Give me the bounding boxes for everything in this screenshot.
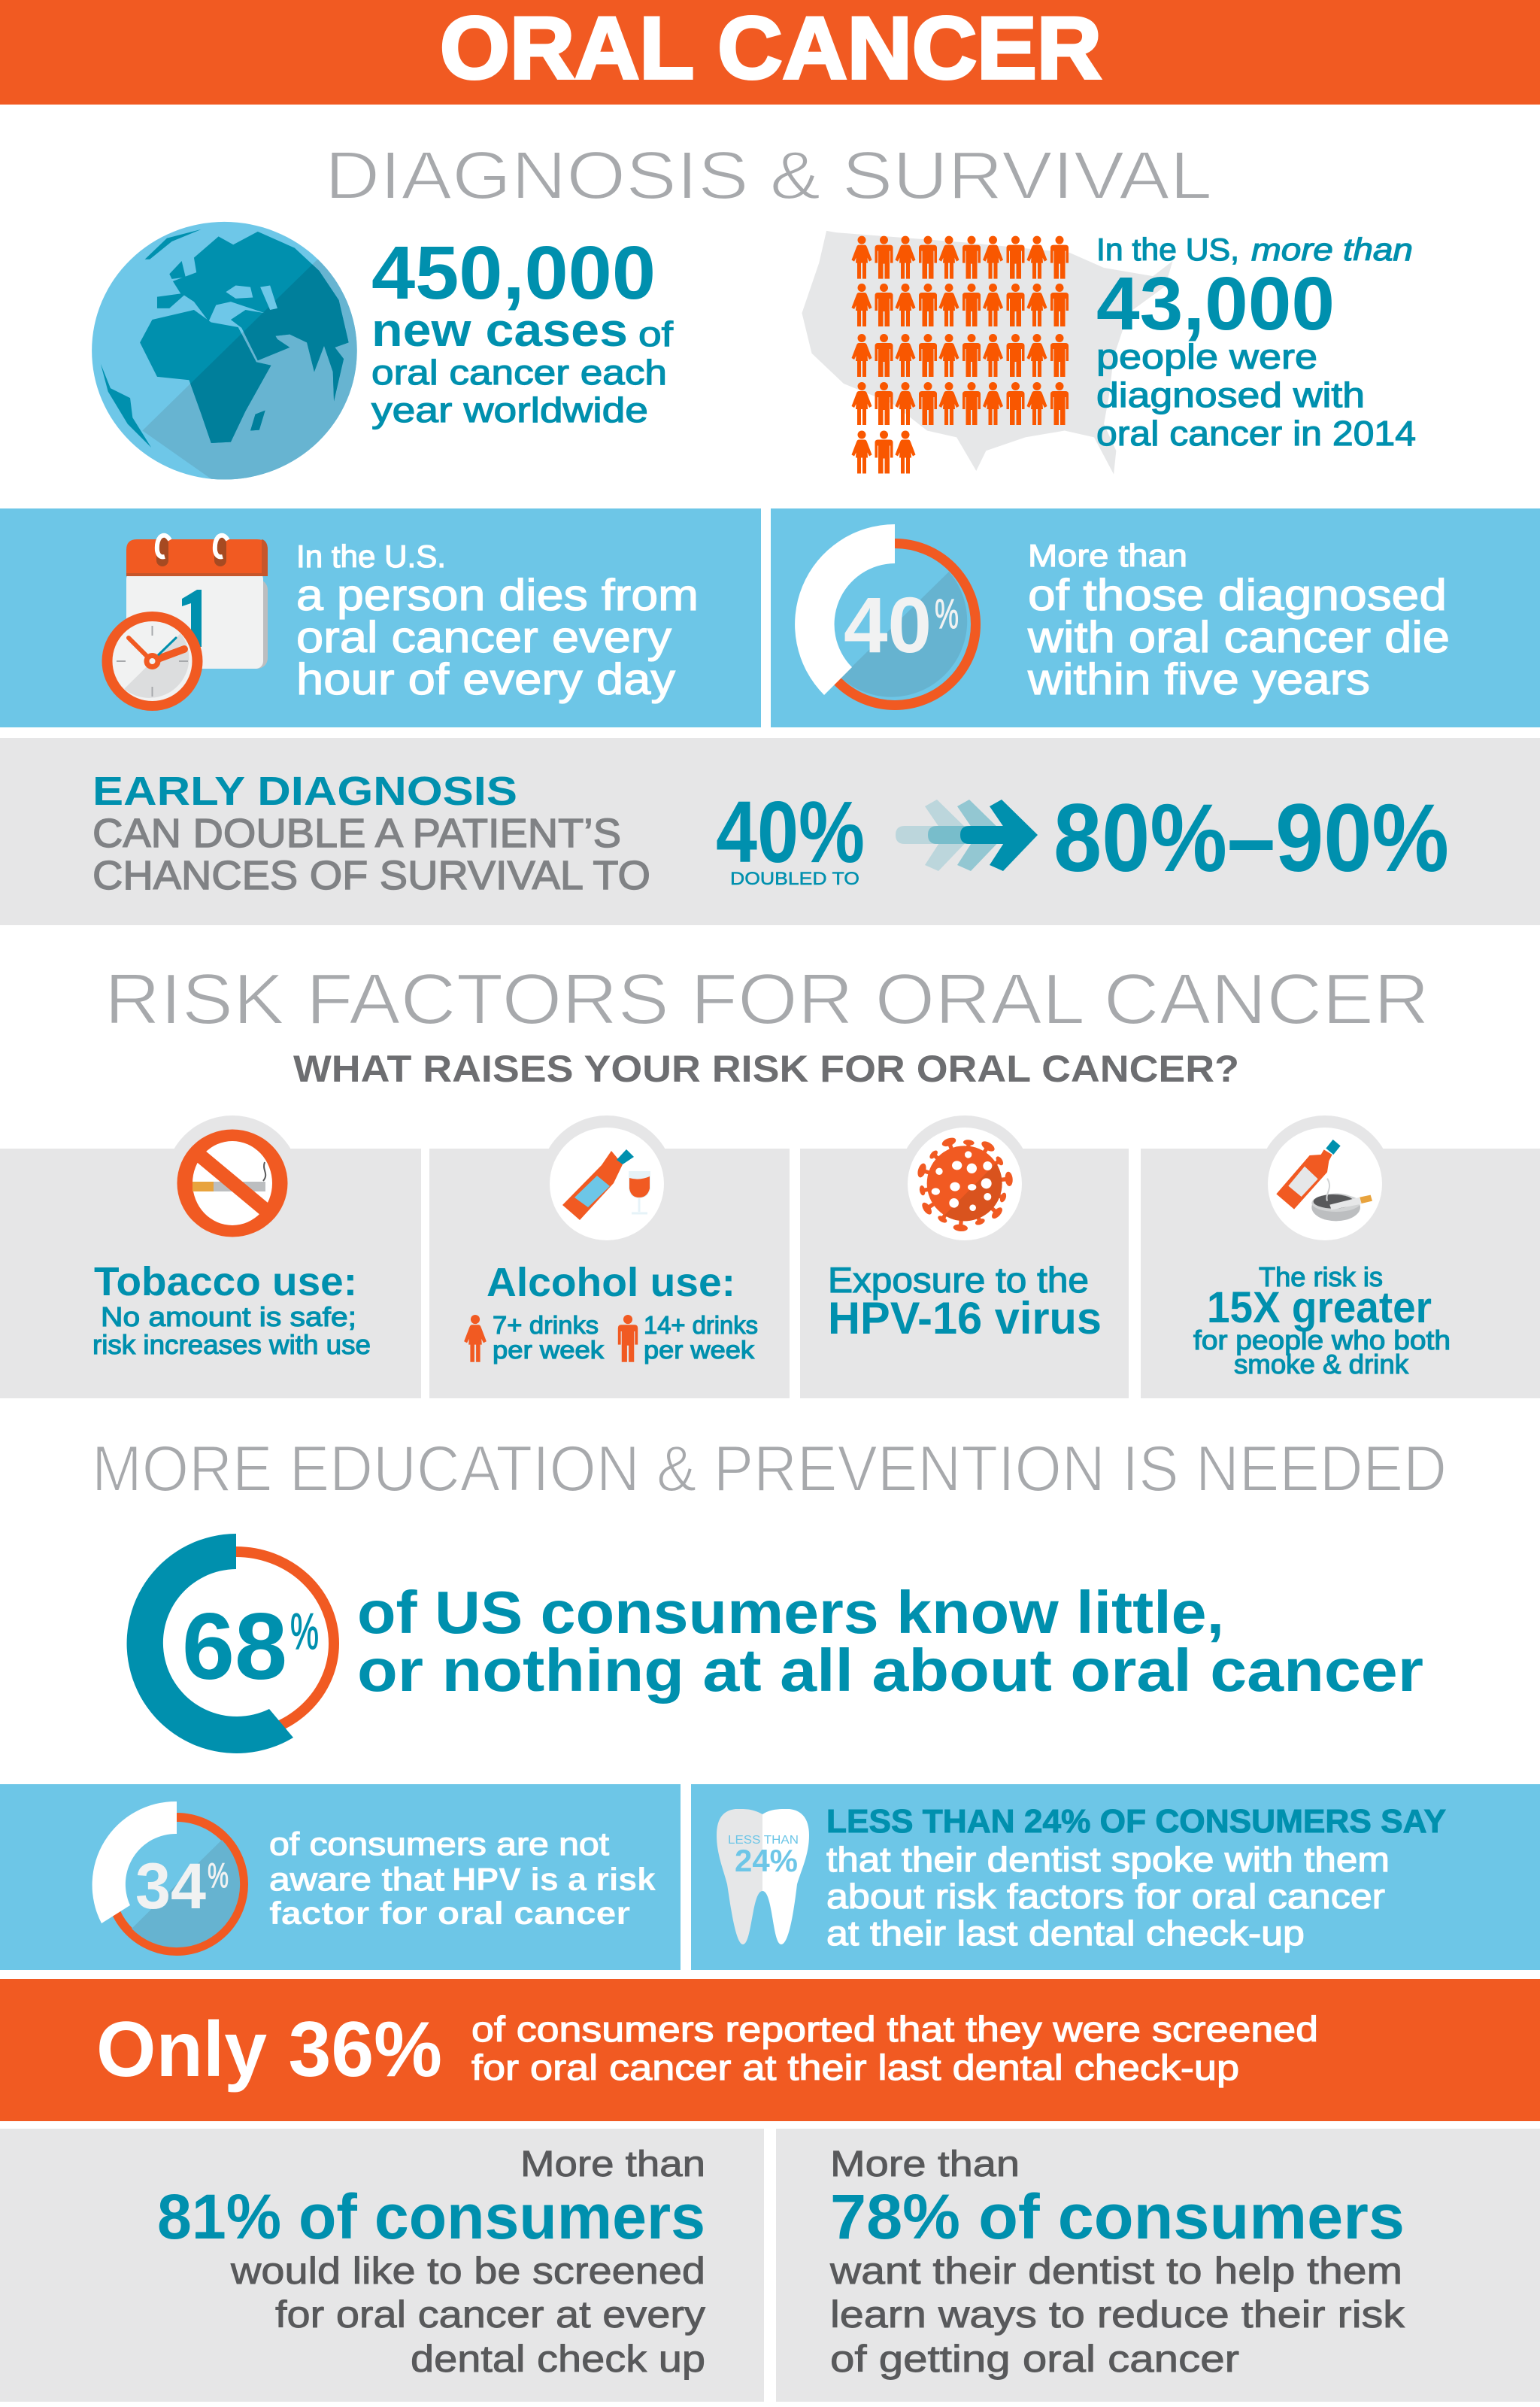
stat: 43,000 diagnosed in US: oral cancer in 2014 — [1096, 414, 1416, 453]
heading: diagnosis and survival: DIAGNOSIS & SURVIVAL — [325, 138, 1212, 214]
icon: US map — [802, 231, 1172, 475]
donut chart: 40% — [795, 524, 976, 706]
panel: 81 percent would like screening — [0, 2129, 764, 2402]
icon: male figure — [618, 1315, 638, 1362]
title banner: ORAL CANCER — [440, 0, 1102, 97]
text: early diagnosis can double — [92, 769, 650, 898]
text: exposure to HPV-16: HPV-16 virus — [828, 1293, 1102, 1343]
text: dentist spoke: that their dentist spoke with them — [826, 1840, 1390, 1879]
text: screened every check up: dental check up — [411, 2338, 705, 2380]
stat: 450,000 new cases worldwide: new cases — [371, 305, 628, 357]
icon: globe — [92, 222, 373, 490]
stat: 80%–90%: 80%–90% — [1053, 785, 1449, 892]
stat text: US consumers know little: of US consumers know little, — [357, 1579, 1224, 1646]
text: help reduce risk: learn ways to reduce their risk — [830, 2293, 1405, 2336]
text: risk 15X greater: 15X greater — [1207, 1283, 1432, 1332]
text: 7+ drinks per week — [493, 1311, 605, 1364]
panel: 78 percent want dentist help: More than — [830, 2144, 1020, 2184]
stat: 43,000 diagnosed in US — [1096, 232, 1416, 453]
text: risk 15X greater — [1193, 1261, 1451, 1380]
stat: 450,000 new cases worldwide: of — [638, 314, 673, 354]
icon: bottle and ashtray — [1276, 1140, 1372, 1221]
text: of those diagnosed: of those diagnosed — [1028, 571, 1447, 620]
panel: 34 percent unaware — [0, 1784, 681, 1970]
icon: no smoking — [177, 1130, 287, 1237]
panel: less than 24 percent — [691, 1784, 1540, 1970]
text: 14+ drinks per week — [644, 1311, 758, 1364]
text: a person dies: In the U.S. — [296, 539, 446, 574]
text: tobacco use: Tobacco use: — [94, 1259, 357, 1304]
stat: 450,000 new cases worldwide: year worldwide — [371, 390, 648, 429]
text: dentist spoke: at their last dental check-up — [826, 1914, 1305, 1953]
donut chart: 68%: % — [290, 1603, 319, 1660]
panel: HPV-16 — [800, 1115, 1129, 1398]
text: not aware HPV: factor for oral cancer — [269, 1896, 630, 1932]
text: tobacco use — [92, 1259, 371, 1360]
text: reported screening: for oral cancer at their last dental check-up — [471, 2047, 1239, 2087]
stat: 40% doubled to: DOUBLED TO — [730, 869, 859, 889]
icon: female figure — [464, 1315, 487, 1362]
text: exposure to HPV-16: Exposure to the — [828, 1260, 1089, 1300]
text: of those diagnosed: More than — [1028, 538, 1187, 573]
text: early diagnosis can double: CHANCES OF SURVIVAL TO — [92, 853, 650, 898]
text: not aware HPV: aware that — [269, 1862, 444, 1898]
stat: 43,000 diagnosed in US: In the US, — [1096, 232, 1239, 267]
icon: tooth — [717, 1809, 809, 1944]
text: 7+ drinks per week: per week — [493, 1336, 605, 1364]
text: not aware HPV: HPV is a risk — [452, 1862, 656, 1898]
donut chart: 40%: 40 — [844, 581, 932, 669]
text: exposure to HPV-16 — [828, 1260, 1102, 1343]
text: tobacco use: No amount is safe; — [101, 1301, 356, 1332]
stat: 450,000 new cases worldwide: 450,000 — [371, 231, 656, 315]
text: not aware HPV — [269, 1826, 656, 1932]
heading: risk factors: RISK FACTORS FOR ORAL CANCER — [105, 959, 1429, 1040]
panel: early diagnosis — [0, 738, 1540, 925]
text: of those diagnosed: within five years — [1027, 655, 1370, 704]
title banner — [0, 0, 1540, 105]
stat: 43,000 diagnosed in US: 43,000 — [1096, 262, 1335, 346]
stat: 450,000 new cases worldwide: oral cancer each — [371, 353, 667, 392]
text: screened every check up: would like to be screened — [230, 2250, 705, 2292]
stat text: US consumers know little — [357, 1579, 1423, 1704]
text: of those diagnosed — [1027, 538, 1450, 704]
donut chart: 34%: 34 — [135, 1850, 206, 1923]
text: 14+ drinks per week: 14+ drinks — [644, 1311, 758, 1339]
icon: tooth: 24% — [735, 1843, 798, 1878]
heading: more education and prevention: MORE EDUCATION & PREVENTION IS NEEDED — [92, 1433, 1447, 1505]
stat: 43,000 diagnosed in US: more than — [1251, 232, 1413, 267]
panel: only 36 percent screened: Only 36% — [96, 2006, 442, 2093]
text: a person dies — [296, 539, 699, 704]
donut chart: 40%: % — [935, 590, 959, 637]
text: not aware HPV: of consumers are not — [269, 1826, 609, 1862]
text: dentist spoke — [826, 1803, 1446, 1953]
text: of those diagnosed: with oral cancer die — [1027, 613, 1450, 662]
panel: 81 percent would like screening: More than — [520, 2144, 705, 2184]
text: early diagnosis can double: EARLY DIAGNOSIS — [92, 769, 517, 814]
panel: 40 percent die within five years — [771, 508, 1540, 727]
text: screened every check up — [230, 2250, 705, 2380]
arrow: three fading chevrons — [896, 800, 1038, 871]
panel: 81 percent would like screening: 81% of consumers — [157, 2181, 705, 2252]
text: alcohol use: Alcohol use: — [487, 1260, 735, 1305]
text: risk 15X greater: for people who both — [1193, 1325, 1451, 1355]
donut chart: 34%: % — [208, 1856, 229, 1895]
text: screened every check up: for oral cancer at every — [275, 2293, 705, 2336]
donut chart: 68% — [127, 1534, 334, 1753]
text: a person dies: a person dies from — [296, 571, 699, 620]
text: dentist spoke: about risk factors for oral cancer — [826, 1877, 1385, 1916]
text: risk 15X greater: The risk is — [1259, 1261, 1383, 1292]
text: dentist spoke: LESS THAN 24% OF CONSUMERS SAY — [826, 1803, 1446, 1840]
panel: person dies every hour — [0, 508, 761, 727]
text: a person dies: hour of every day — [296, 655, 675, 704]
text: help reduce risk: want their dentist to help them — [829, 2250, 1402, 2292]
text: reported screening — [471, 2009, 1318, 2087]
text: help reduce risk: of getting oral cancer — [830, 2338, 1239, 2380]
panel: only 36 percent screened — [0, 1979, 1540, 2121]
panel: alcohol use — [429, 1115, 790, 1398]
donut chart: 34% — [92, 1801, 244, 1951]
icon: calendar and clock — [102, 536, 268, 711]
stat: 43,000 diagnosed in US: people were — [1096, 337, 1317, 376]
text: early diagnosis can double: CAN DOUBLE A PATIENT’S — [92, 811, 621, 856]
icon: tooth: LESS THAN — [728, 1834, 799, 1847]
subheading: what raises your risk: WHAT RAISES YOUR RISK FOR ORAL CANCER? — [293, 1048, 1239, 1090]
stat: 450,000 new cases worldwide — [371, 231, 673, 429]
text: tobacco use: risk increases with use — [92, 1329, 371, 1360]
text: help reduce risk — [829, 2250, 1405, 2380]
text: a person dies: oral cancer every — [296, 613, 671, 662]
icon: bottle and wine glass — [562, 1149, 650, 1220]
icon: virus — [916, 1136, 1014, 1232]
text: 7+ drinks per week: 7+ drinks — [493, 1311, 599, 1339]
people grid: 43 figures — [851, 236, 1069, 474]
stat text: US consumers know little: or nothing at all about oral cancer — [357, 1637, 1423, 1704]
panel: tobacco use — [0, 1115, 421, 1398]
donut chart: 68%: 68 — [182, 1595, 287, 1699]
stat: 40% doubled to: 40% — [716, 783, 865, 881]
panel: 78 percent want dentist help — [776, 2129, 1540, 2402]
text: risk 15X greater: smoke & drink — [1234, 1349, 1409, 1380]
text: 14+ drinks per week: per week — [644, 1336, 755, 1364]
stat: 43,000 diagnosed in US: diagnosed with — [1096, 375, 1365, 414]
panel: 78 percent want dentist help: 78% of consumers — [830, 2181, 1405, 2252]
text: reported screening: of consumers reported that they were screened — [471, 2009, 1318, 2049]
panel: 15X greater — [1141, 1115, 1540, 1398]
